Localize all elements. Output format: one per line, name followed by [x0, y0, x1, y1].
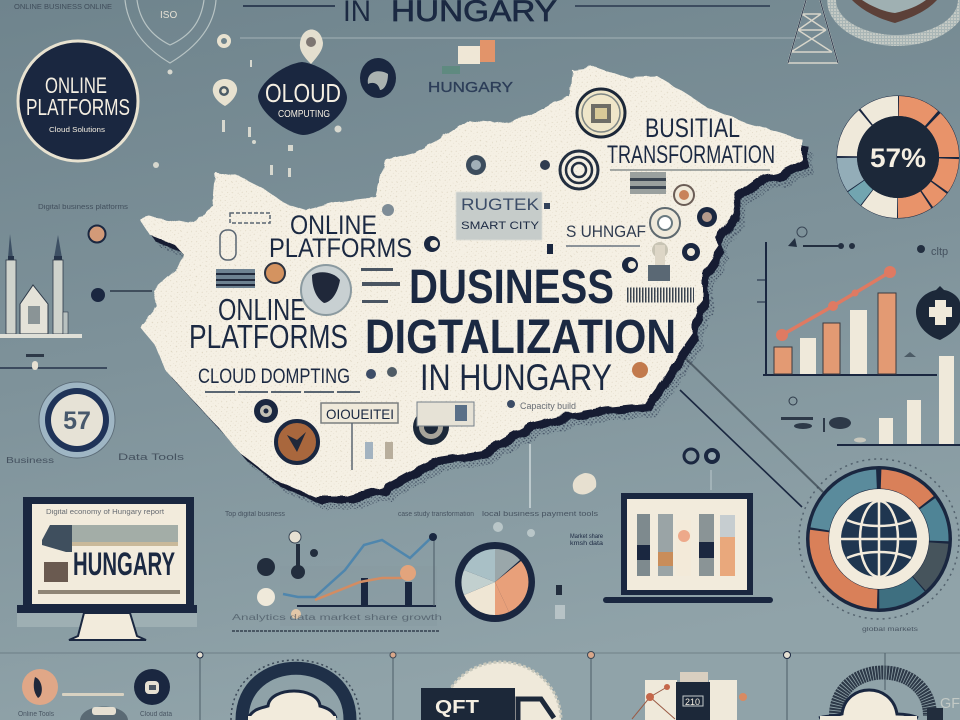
donut chart: 57%: 57% [870, 143, 926, 173]
bottom row dividers [0, 652, 960, 720]
badge: online platforms: ONLINE [45, 73, 107, 98]
bar chart: lower right [837, 352, 960, 445]
card: business tile: RUGTEK [461, 195, 540, 214]
icon: ring emblem top [577, 89, 625, 137]
main heading [365, 261, 676, 364]
left: church illustration [0, 234, 82, 338]
bottom icon: cloud with headset arc [819, 653, 960, 720]
bullet dots left [0, 226, 152, 370]
small caption left: Business [6, 456, 54, 465]
badge: cloud: OLOUD [265, 78, 341, 108]
main heading: DIGTALIZATION [365, 311, 676, 364]
subheading: IN HUNGARY [420, 357, 612, 398]
line chart: Analytics data market share growth [232, 613, 442, 622]
barcode [627, 288, 694, 302]
label: digital transformation: TRANSFORMATION [607, 141, 775, 169]
laptop [603, 493, 773, 603]
icon: lower emblems [254, 362, 648, 463]
bottom icon: peach badge and dark badge: Cloud data [140, 711, 172, 718]
icon: map pins [213, 30, 323, 106]
badge: dark plus icon [916, 286, 960, 340]
small caption centre: kmsh data [570, 541, 604, 547]
label: digital transformation [607, 113, 775, 170]
icon: dark badge [360, 58, 396, 98]
icon: flag and Hungary label: HUNGARY [428, 79, 513, 96]
card: business tile [456, 192, 542, 240]
panel: Hungary map [140, 67, 814, 510]
monitor: Hungary: Digital economy of Hungary report [46, 509, 164, 516]
badge: online platforms: Cloud Solutions [49, 127, 106, 134]
bottom icon: dark panel: QFT [435, 697, 479, 717]
icon: server stripes [630, 172, 670, 281]
label: cloud computing: CLOUD DOMPTING [198, 365, 350, 388]
small caption centre: Market share [570, 534, 604, 540]
card: small screen [417, 400, 576, 426]
badge: cloud: COMPUTING [278, 109, 330, 120]
label: online platforms lower [189, 292, 348, 355]
icon: small key glyph: cltp [931, 246, 948, 258]
badge: 57 gauge: 57 [63, 407, 91, 435]
badge: cloud [258, 62, 347, 135]
label: online platforms upper: ONLINE [290, 210, 377, 240]
bottom icon: document cluster: 210 [685, 697, 700, 707]
icon: flag and Hungary label [428, 40, 513, 96]
donut chart: 57% [836, 96, 960, 218]
small header caption: ONLINE BUSINESS ONLINE [14, 4, 112, 11]
monitor: Hungary: HUNGARY [73, 546, 175, 582]
line chart: Top digital business [225, 511, 285, 518]
pale blob and pin markers [530, 444, 720, 508]
top-left caption above church: Digital business platforms [38, 204, 129, 211]
card: business tile: SMART CITY [461, 220, 540, 232]
bottom icon: peach badge and dark badge: Online Tools [18, 711, 54, 718]
bottom icon: dark panel [421, 662, 561, 720]
label: digital transformation: BUSITIAL [645, 113, 740, 143]
connector lines to globe [680, 353, 823, 507]
monitor: Hungary [17, 497, 197, 640]
icon: speckled scatter [153, 60, 342, 177]
globe dial [799, 459, 959, 619]
line chart [225, 511, 474, 631]
icon: orange dot and stripes [216, 263, 285, 288]
box label [321, 403, 398, 470]
caption under globe: global markets [862, 627, 918, 633]
map land [140, 67, 803, 497]
bottom icon: cloud in arch [231, 660, 360, 720]
icon: top right dial [827, 0, 960, 46]
label: online platforms lower: ONLINE [218, 292, 306, 327]
list fragment [361, 268, 400, 379]
bottom icon: document cluster [632, 672, 747, 720]
label: online platforms upper [269, 210, 412, 263]
icon: radio tower [788, 0, 838, 63]
icon: shield outline [125, 0, 216, 63]
icon: big shield circle [301, 265, 351, 315]
icons: small circles right [382, 155, 717, 273]
box label: OIOUEITEI [326, 406, 394, 422]
label: online platforms upper: PLATFORMS [269, 233, 412, 263]
main heading: DUSINESS [409, 261, 614, 314]
label: online platforms lower: PLATFORMS [189, 318, 348, 355]
line chart: case study transformation [398, 511, 474, 518]
badge: 57 gauge [39, 382, 115, 458]
header: title fragment [240, 0, 800, 38]
small caption centre: local business payment tools [482, 511, 599, 518]
badge: online platforms [18, 41, 138, 161]
icon: shield outline: ISO [160, 10, 177, 21]
icon: device outline [220, 213, 270, 260]
card: small screen: Capacity build [520, 401, 576, 411]
map shadow [146, 74, 809, 504]
icon: small tools [781, 397, 851, 432]
icon: small key glyph [788, 227, 948, 258]
label: Hungary small: S UHNGAF [566, 222, 646, 241]
small caption left [6, 452, 185, 465]
bottom icon: peach badge and dark badge [18, 669, 172, 720]
pie chart [455, 542, 535, 622]
map halo [151, 80, 814, 510]
badge: online platforms: PLATFORMS [26, 94, 130, 120]
small caption left: Data Tools [118, 452, 185, 462]
icon: spiral emblem [560, 151, 598, 189]
small caption centre [482, 511, 604, 619]
bar chart with trend line [757, 242, 937, 375]
